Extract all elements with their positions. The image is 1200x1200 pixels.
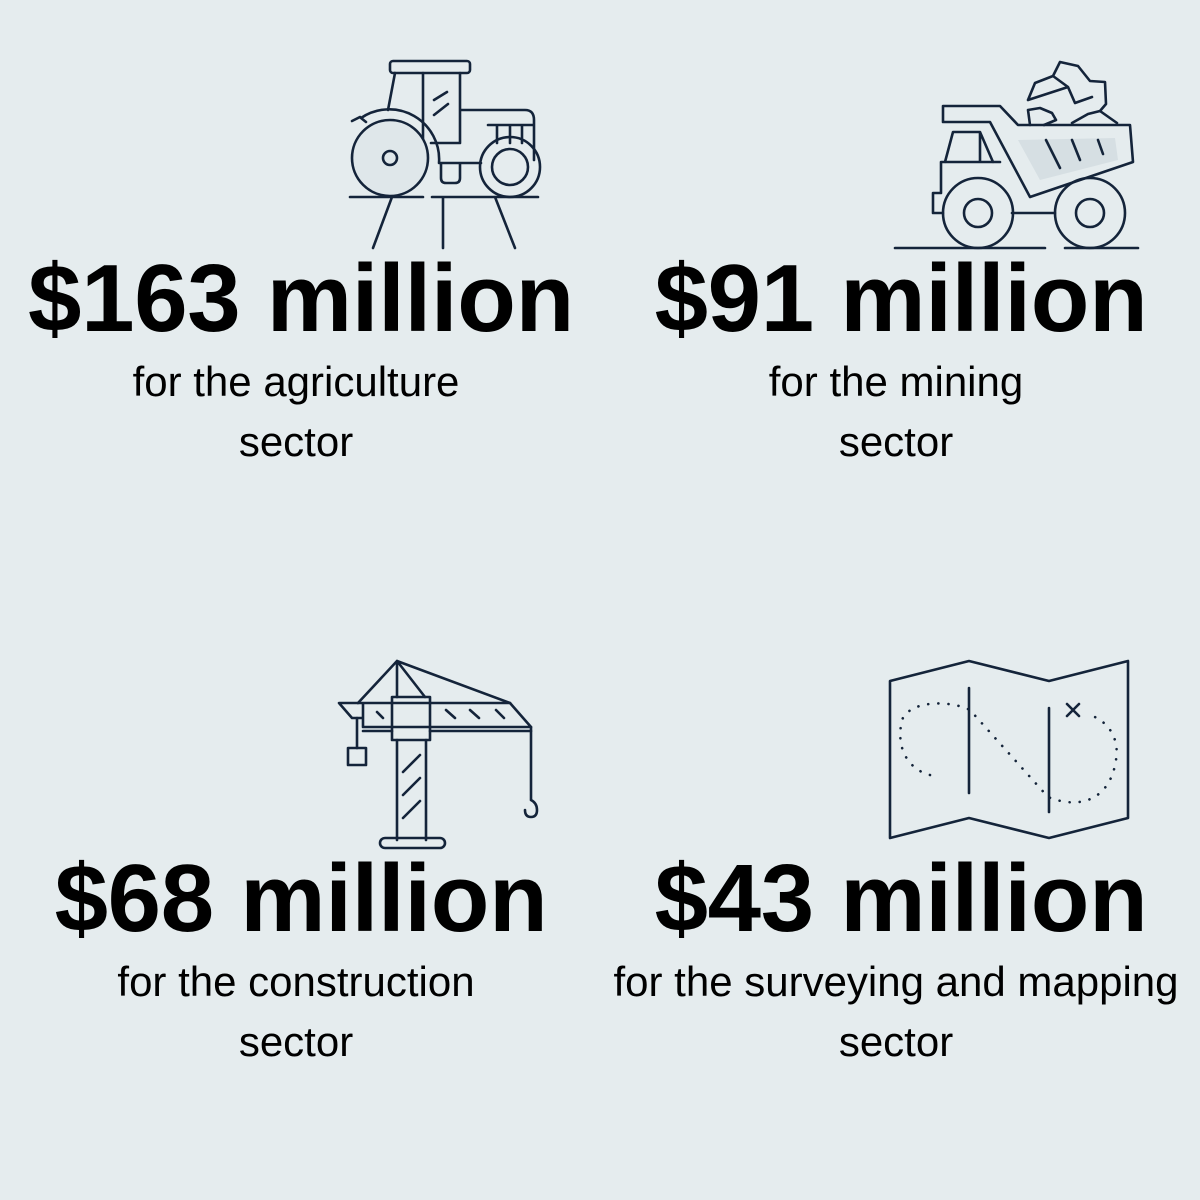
icon: crane bbox=[339, 661, 537, 848]
text: agriculture: for the agriculture bbox=[133, 358, 459, 405]
text: construction: sector bbox=[239, 1018, 353, 1065]
text: surveying: for the surveying and mapping bbox=[613, 958, 1178, 1005]
heading: $163 million: $163 million bbox=[28, 245, 574, 352]
heading: $68 million: $68 million bbox=[55, 845, 547, 952]
text: agriculture bbox=[133, 358, 459, 465]
text: agriculture: sector bbox=[239, 418, 353, 465]
icon: map bbox=[890, 661, 1128, 838]
text: surveying: sector bbox=[839, 1018, 953, 1065]
text: mining bbox=[769, 358, 1023, 465]
text: construction bbox=[117, 958, 475, 1065]
text: surveying bbox=[613, 958, 1178, 1065]
text: construction: for the construction bbox=[117, 958, 475, 1005]
text: mining: sector bbox=[839, 418, 953, 465]
heading: $91 million: $91 million bbox=[655, 245, 1147, 352]
icon: mining truck bbox=[895, 62, 1138, 248]
heading: $43 million: $43 million bbox=[655, 845, 1147, 952]
icon: tractor bbox=[350, 61, 540, 248]
text: mining: for the mining bbox=[769, 358, 1023, 405]
